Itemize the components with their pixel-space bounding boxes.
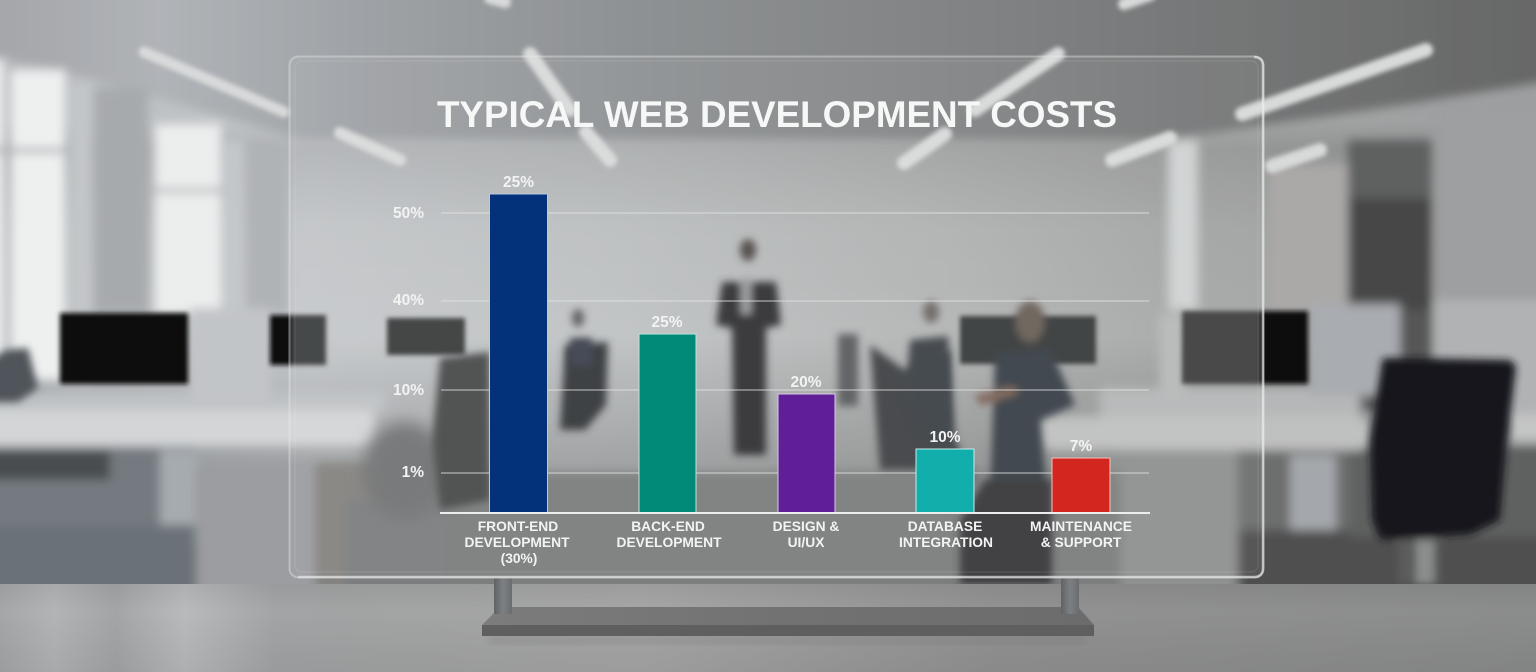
bar: database [916,429,974,513]
category labels [464,519,1132,566]
ceiling [0,0,1536,140]
desks [0,388,1536,450]
gridlines [441,213,1149,473]
bar: front-end: 25% [503,174,534,191]
category labels: UI/UX [788,535,825,550]
table surface [0,584,1536,672]
people [570,239,1075,584]
category labels: DEVELOPMENT [464,535,570,550]
bar: design [778,374,835,513]
glass panel stand [482,578,1094,644]
category labels: BACK-END [631,519,705,534]
floor and under-desk areas [0,447,1536,604]
category labels: INTEGRATION [899,535,993,550]
y axis labels: 1% [402,464,424,481]
bar: maintenance: 7% [1070,438,1092,455]
floor [0,472,1536,602]
title: TYPICAL WEB DEVELOPMENT COSTS [437,94,1117,135]
chairs [0,334,1516,584]
monitors [60,311,1308,384]
category labels: DEVELOPMENT [616,535,722,550]
bar: maintenance [1052,438,1110,513]
bar: back-end: 25% [651,314,683,331]
category labels: FRONT-END [478,519,558,534]
left window wall [0,60,288,390]
category labels: (30%) [501,551,537,566]
chair base blob [363,422,447,518]
category labels: DATABASE [908,519,982,534]
ceiling lights [144,0,1426,166]
bar: database: 10% [929,429,961,446]
category labels: DESIGN & [773,519,839,534]
y axis labels: 50% [393,205,424,222]
bar: front-end [490,174,548,513]
monitor backs [190,304,1400,400]
category labels: & SUPPORT [1041,535,1122,550]
category labels: MAINTENANCE [1030,519,1132,534]
glass panel [290,56,1264,578]
bar chart [393,174,1150,566]
bar: design: 20% [790,374,822,391]
y axis labels [393,205,424,481]
y axis labels: 10% [393,382,424,399]
bar: back-end [639,314,696,513]
right wall [1168,100,1536,420]
x axis [440,512,1150,514]
y axis labels: 40% [393,292,424,309]
